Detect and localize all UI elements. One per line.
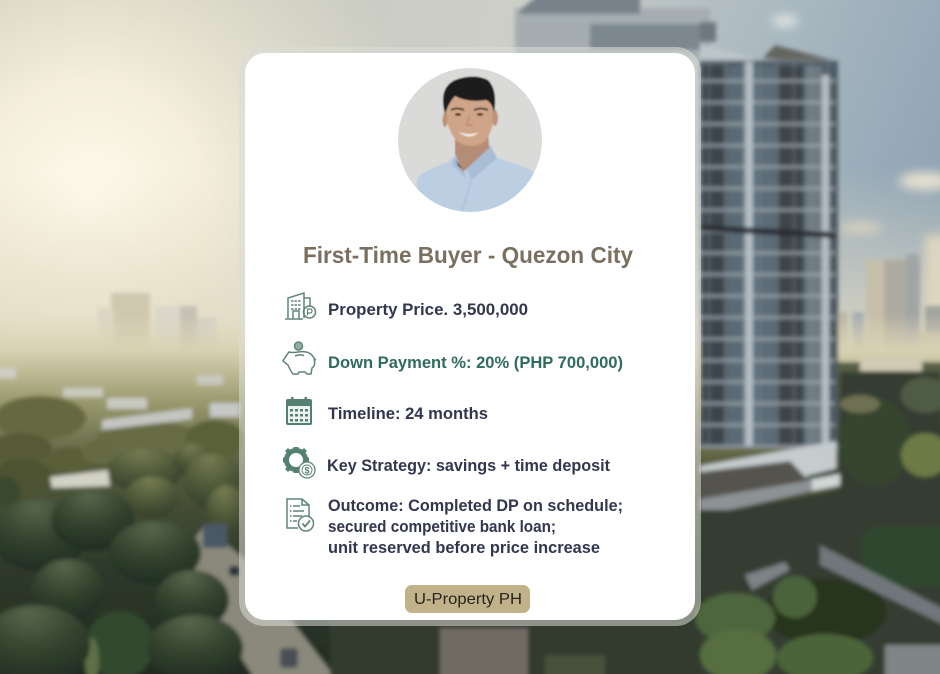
- icon: document with check mark: [287, 499, 314, 531]
- text: key strategy: Key Strategy: savings + time deposit: [327, 457, 610, 475]
- card: translucent frame: [239, 47, 701, 626]
- right side greenery: [700, 510, 850, 570]
- card: white panel: [245, 53, 695, 620]
- text: property price: Property Price. 3,500,000: [328, 301, 528, 319]
- condominium tower: [515, 8, 710, 58]
- left pale rooftops: [0, 368, 16, 378]
- avatar: man in light-blue shirt: [398, 68, 542, 212]
- text: outcome: unit reserved before price increase: [328, 539, 600, 557]
- icon: gear with dollar coin: $: [304, 466, 310, 476]
- road: [178, 525, 345, 674]
- text: timeline: Timeline: 24 months: [328, 405, 488, 423]
- text: down payment: Down Payment %: 20% (PHP 700,000): [328, 354, 623, 372]
- text: outcome: secured competitive bank loan;: [328, 518, 556, 536]
- dark foreground trees: [0, 499, 88, 571]
- ground: [0, 315, 940, 674]
- icon: calendar: [286, 397, 312, 425]
- badge: U-Property PH: [405, 585, 530, 613]
- icon: building with peso coin: [285, 293, 316, 319]
- podium: [700, 441, 836, 497]
- icon: piggy bank with coin: [283, 342, 316, 374]
- badge: U-Property PH: U-Property PH: [414, 591, 522, 608]
- title: First-Time Buyer - Quezon City: [303, 242, 633, 268]
- text: outcome: [328, 497, 623, 557]
- distant towers: [111, 293, 150, 368]
- text: outcome: Outcome: Completed DP on schedule;: [328, 497, 623, 515]
- lower centre: [330, 620, 710, 674]
- icon: gear with dollar coin: [283, 447, 315, 478]
- left trees: [0, 396, 86, 440]
